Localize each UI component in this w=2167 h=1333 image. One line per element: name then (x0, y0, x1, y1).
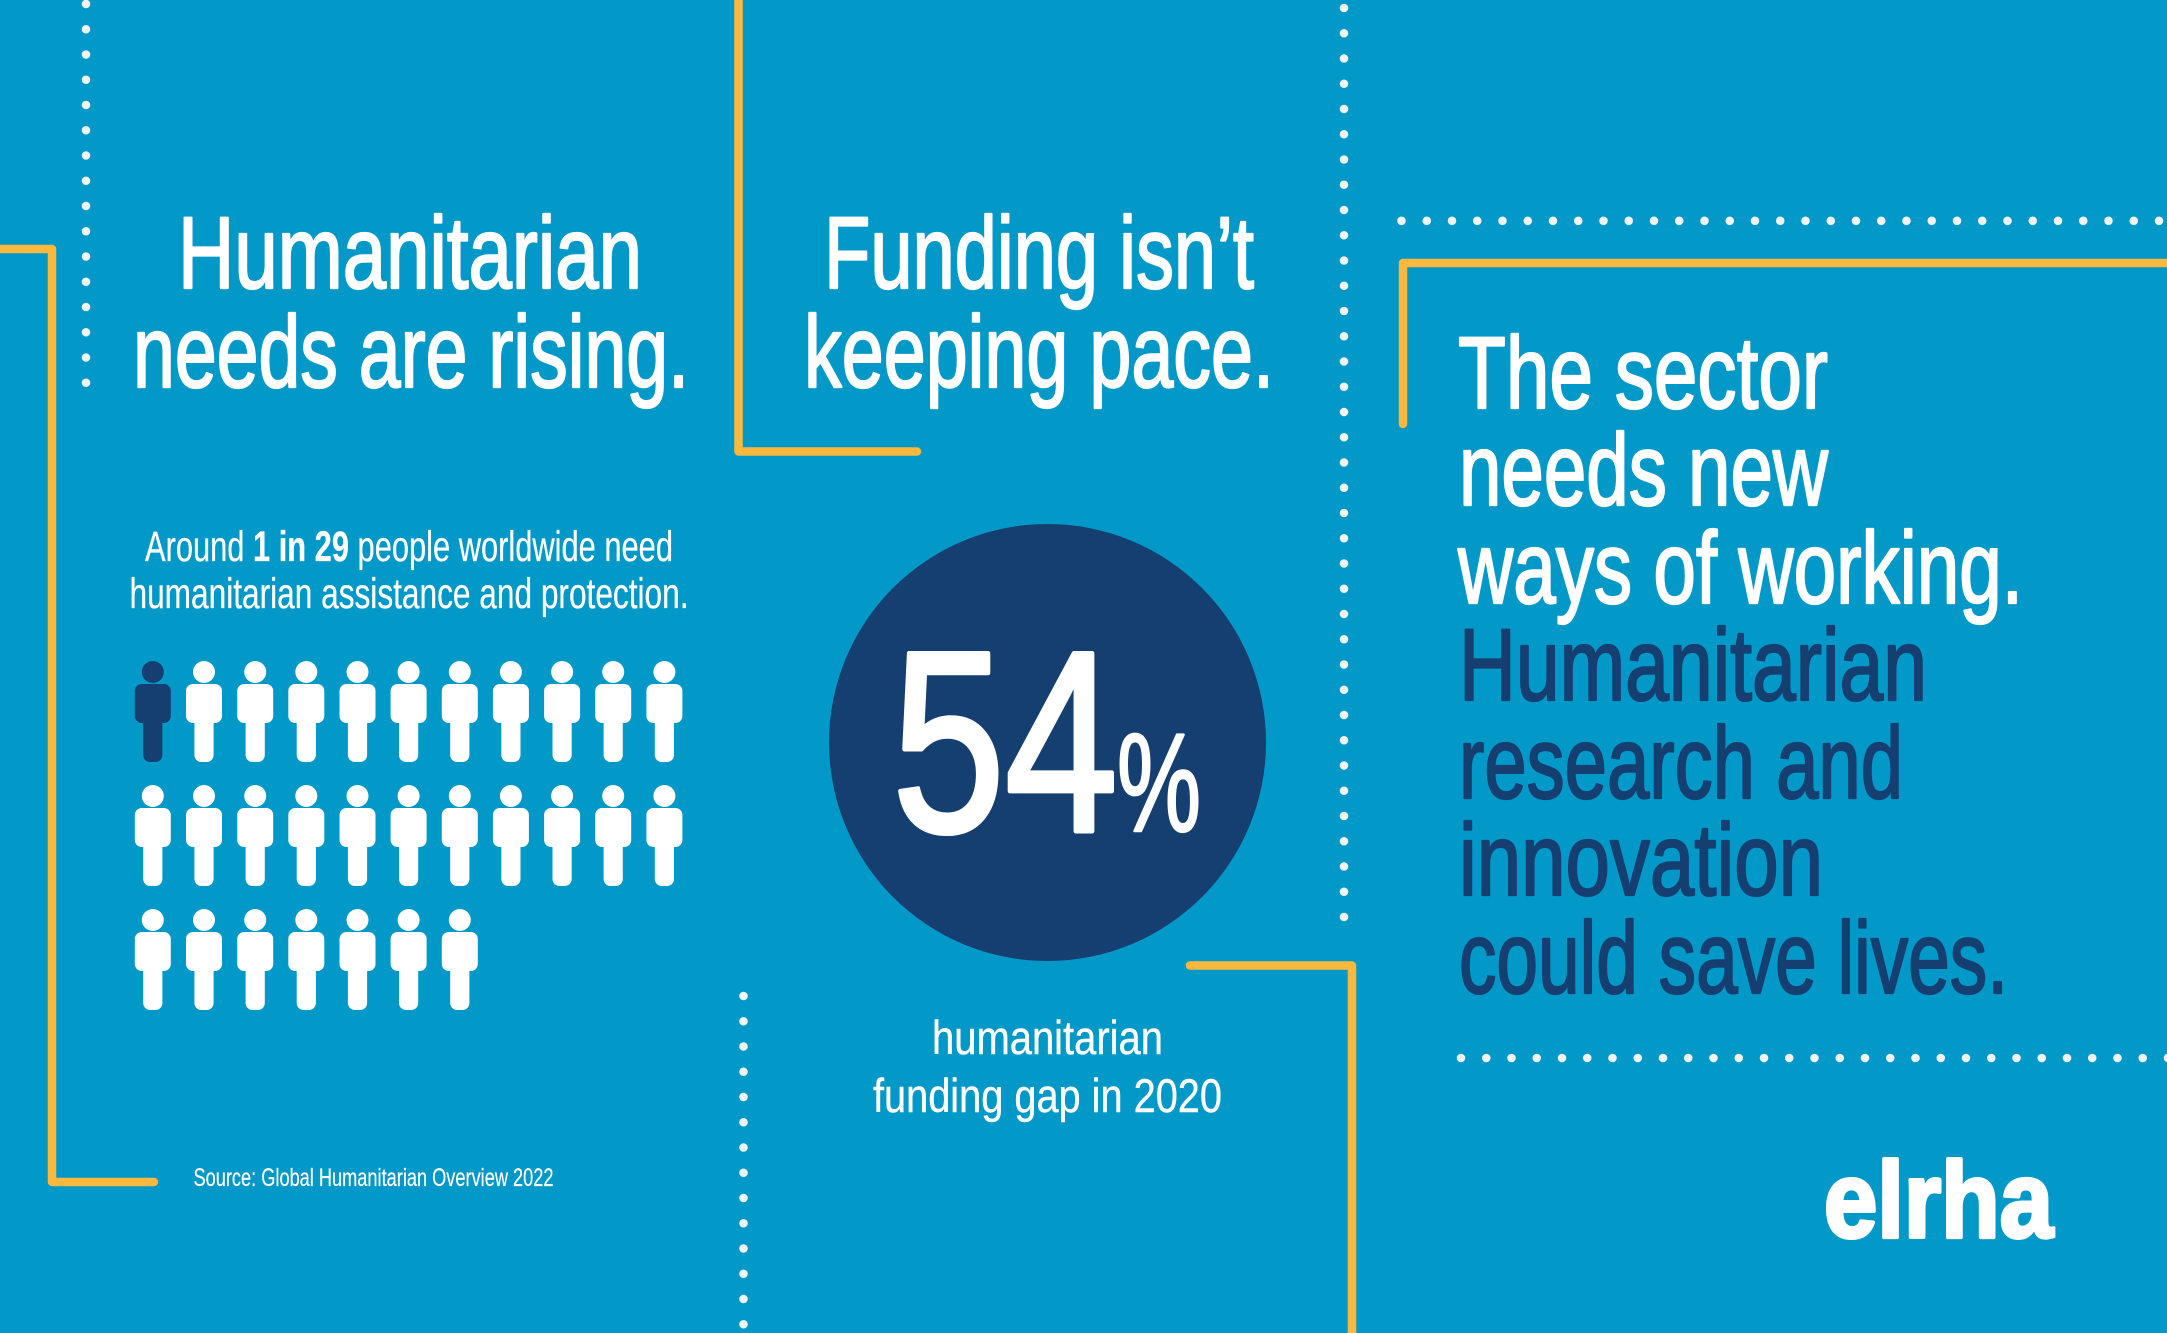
icon: highlighted person (135, 661, 171, 762)
heading: funding isn't keeping pace: keeping pace. (804, 295, 1274, 409)
text block: 1 in 29 people: Around 1 in 29 people worldwide need (145, 523, 673, 571)
heading: the sector needs new ways of working (1457, 316, 2023, 625)
heading: humanitarian needs are rising: needs are rising. (133, 295, 689, 409)
stat circle: 54%: 54 (892, 597, 1118, 886)
text block: 1 in 29 people: humanitarian assistance and protection. (130, 570, 688, 618)
stat circle: 54%: % (1117, 704, 1201, 861)
heading: humanitarian research and innovation could save lives: innovation (1459, 803, 1823, 917)
text block: 1 in 29 people (130, 523, 688, 618)
heading: the sector needs new ways of working: needs new (1459, 413, 1828, 527)
pictogram: 29 people (135, 661, 682, 1010)
pictogram row 1 (186, 661, 682, 762)
pictogram row 2 (135, 785, 682, 886)
bracket: right yellow (1403, 263, 2167, 424)
heading: humanitarian needs are rising: Humanitarian (178, 196, 642, 310)
bracket: centre bottom yellow (1190, 966, 1352, 1333)
heading: humanitarian needs are rising (133, 196, 689, 409)
dotted line: bottom right row (1461, 1054, 2167, 1062)
heading: the sector needs new ways of working: The sector (1458, 316, 1828, 430)
dotted line: centre right column (1340, 8, 1348, 922)
dotted line: left column (82, 4, 90, 384)
heading: humanitarian research and innovation could save lives (1459, 608, 2008, 1015)
heading: funding isn't keeping pace: Funding isn’t (824, 196, 1254, 310)
source note: Source: Global Humanitarian Overview 2022 (194, 1164, 554, 1192)
caption: humanitarian funding gap: humanitarian (932, 1011, 1163, 1064)
bracket: centre top yellow (738, 0, 917, 452)
dotted line: centre bottom column (739, 996, 748, 1330)
logo: elrha: elrha (1824, 1139, 2054, 1260)
heading: funding isn't keeping pace (804, 196, 1274, 409)
pictogram row 3 (135, 909, 478, 1010)
stat circle: 54% (829, 524, 1266, 961)
caption: humanitarian funding gap (873, 1011, 1222, 1122)
dotted line: top right row (1402, 217, 2167, 225)
heading: humanitarian research and innovation could save lives: research and (1459, 706, 1903, 820)
heading: humanitarian research and innovation could save lives: Humanitarian (1459, 608, 1927, 722)
bracket: left yellow (0, 249, 154, 1182)
caption: humanitarian funding gap: funding gap in 2020 (873, 1069, 1222, 1122)
